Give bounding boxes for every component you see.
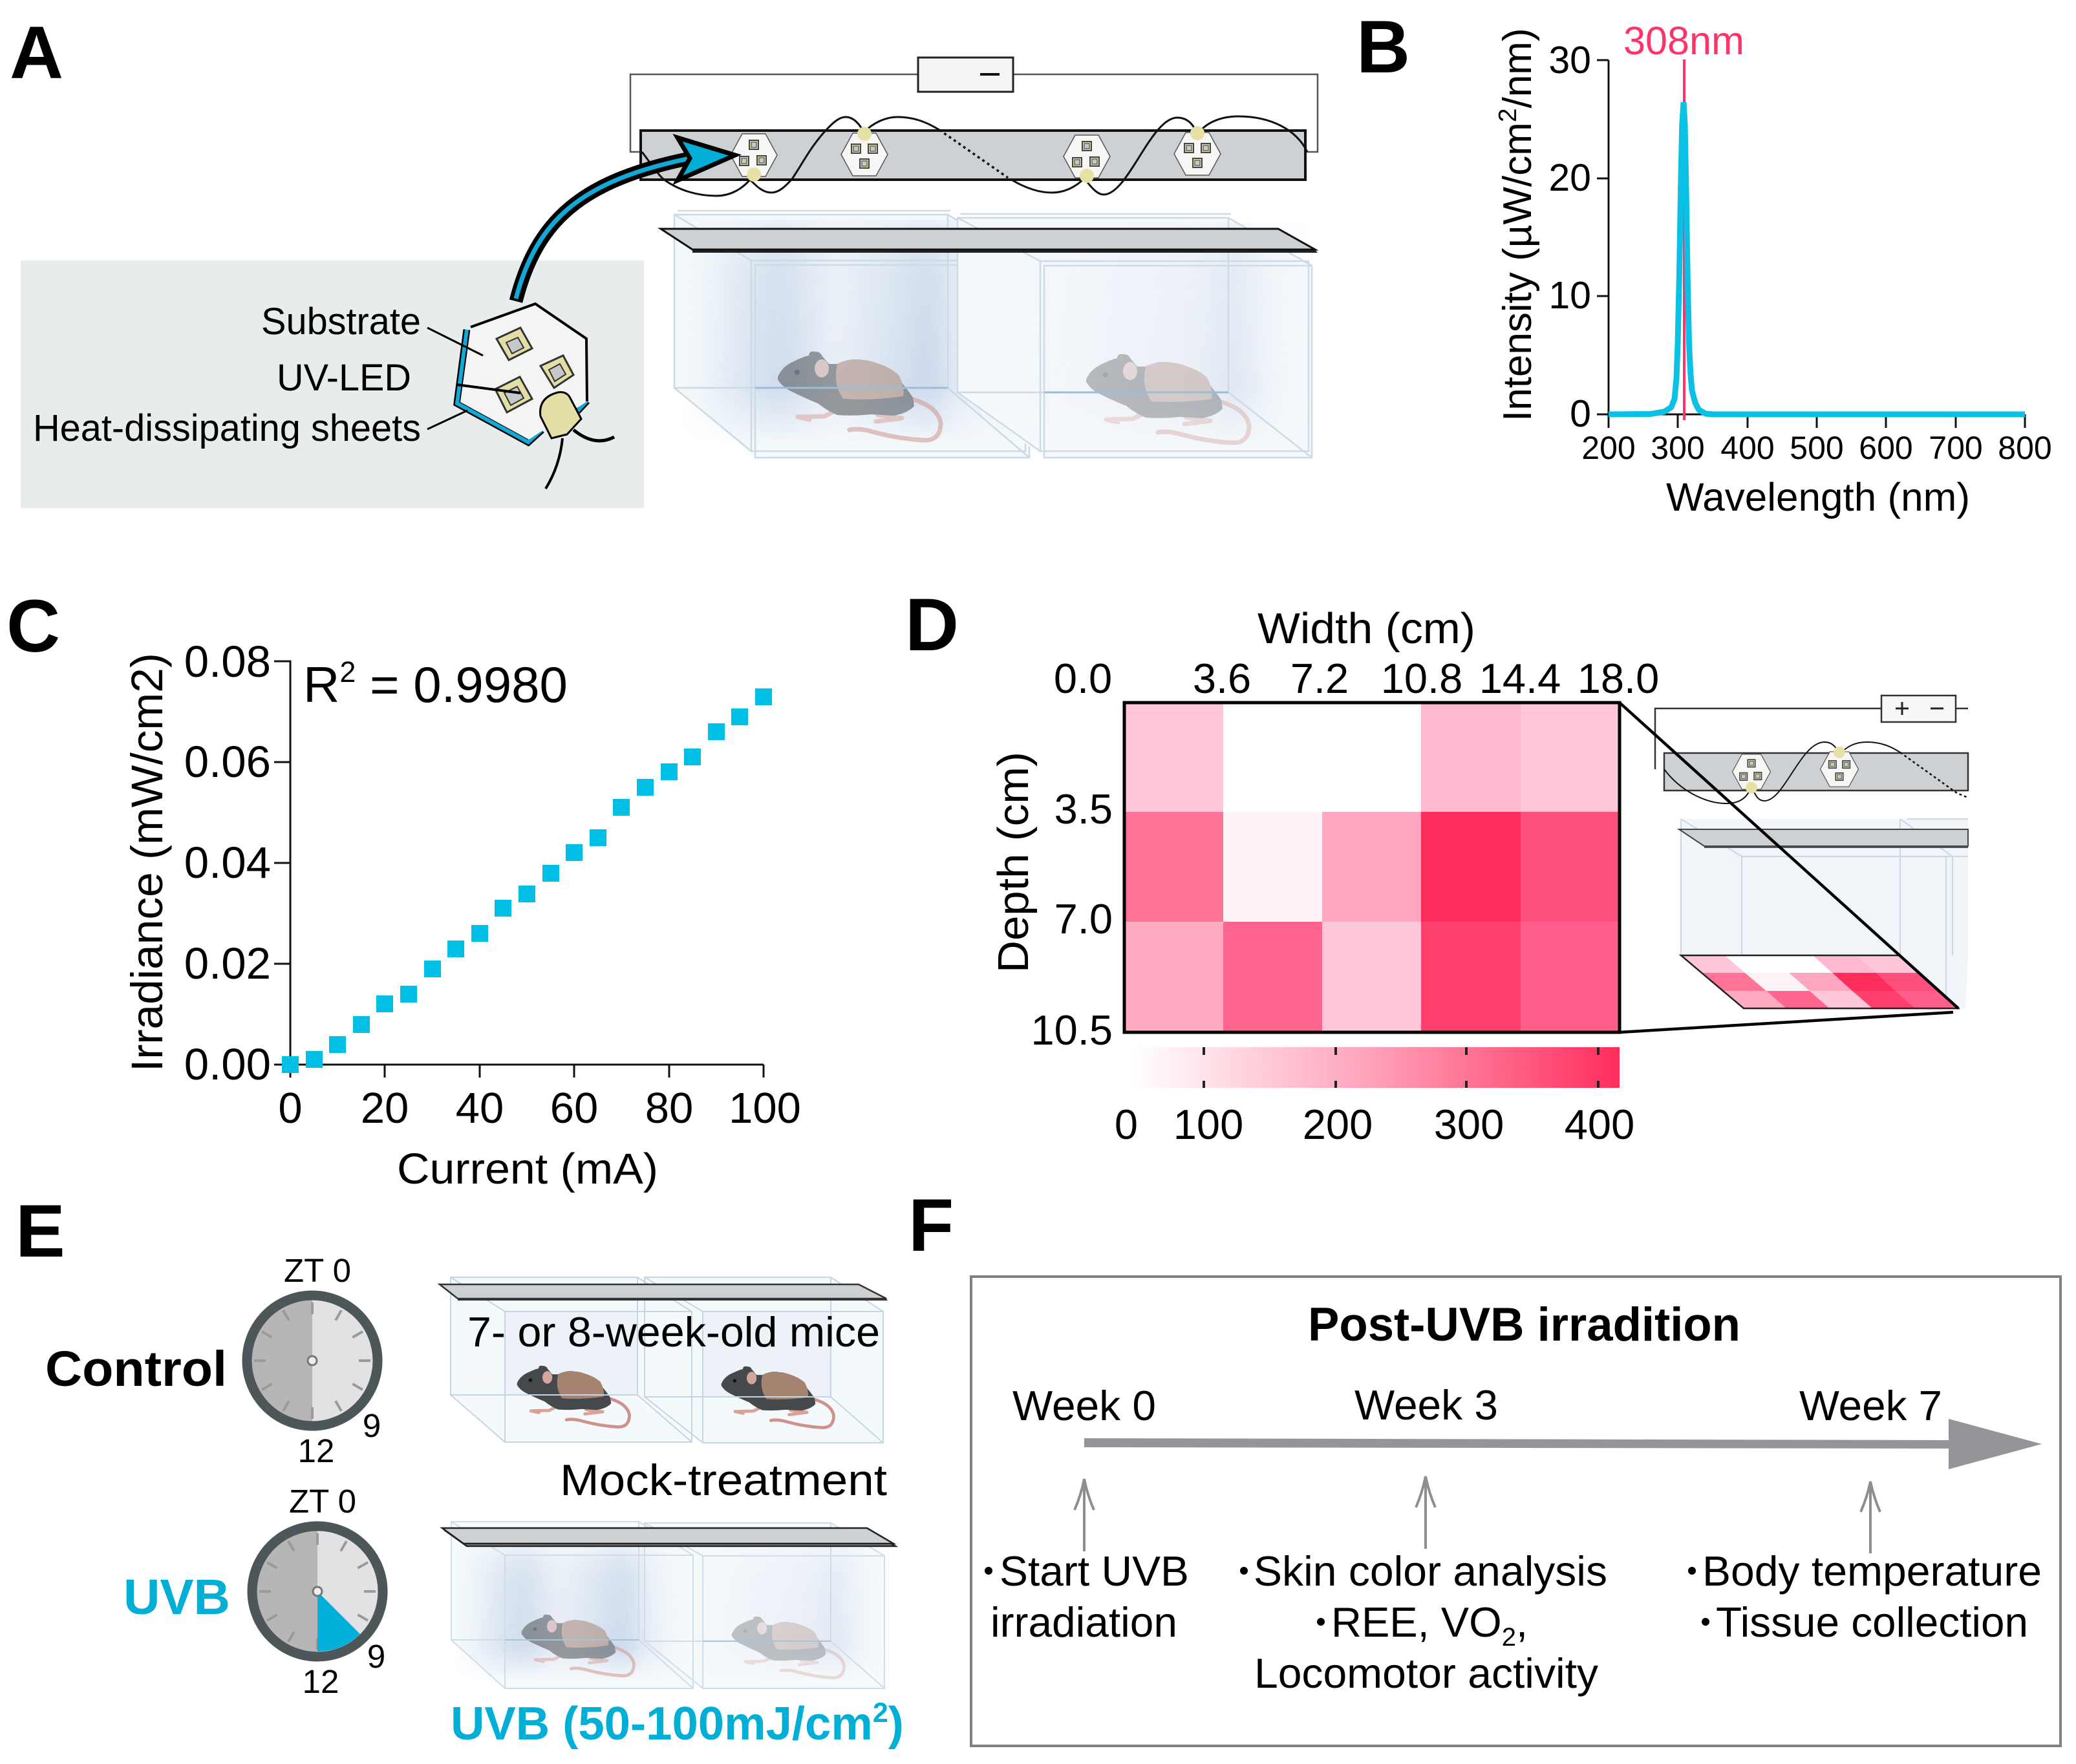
y tick labels: 0.02 <box>184 939 271 988</box>
colour bar labels: 0 <box>1115 1101 1138 1148</box>
zoom connector lines <box>1620 703 1958 1032</box>
y axis title: /nm) <box>1495 28 1540 108</box>
label: Substrate: Substrate <box>261 301 421 343</box>
LED bar <box>641 116 1307 196</box>
text: week 3 measurements: , <box>1516 1599 1528 1646</box>
x axis title: Wavelength (nm) <box>1666 475 1970 519</box>
y axis title: Irradiance (mW/cm2) <box>122 653 172 1072</box>
colour bar <box>1115 1047 1634 1148</box>
x axis title: Current (mA) <box>397 1145 658 1193</box>
UVB mouse left <box>522 1615 634 1676</box>
week 7 label: Week 7 <box>1799 1382 1942 1429</box>
timeline arrow <box>1084 1419 2042 1469</box>
text: week 3 measurements: 2 <box>1502 1623 1516 1652</box>
panel: timeline box <box>971 1277 2060 1746</box>
text: start UVB: irradiation <box>990 1599 1177 1646</box>
x tick labels: 400 <box>1720 430 1775 466</box>
x tick labels <box>278 1084 801 1132</box>
heatmap top axis: 0.0 <box>1054 655 1112 702</box>
x tick labels: 60 <box>550 1084 598 1132</box>
heatmap left axis: 3.5 <box>1054 785 1113 833</box>
clock: UVB labels: 9 <box>367 1638 385 1675</box>
label: UVB: UVB <box>123 1569 230 1625</box>
heatmap left axis: 7.0 <box>1054 895 1113 942</box>
UVB mouse right <box>732 1617 844 1678</box>
clock: UVB labels <box>289 1483 385 1700</box>
x tick labels: 0 <box>278 1084 303 1132</box>
control mouse left <box>517 1366 630 1427</box>
text: week 7 measurements: Body temperature <box>1702 1547 2042 1595</box>
label: mice age: 7- or 8-week-old mice <box>467 1308 880 1355</box>
arrow: LED detail to bar <box>516 138 735 301</box>
LED module 4 <box>1174 126 1221 175</box>
control mouse right <box>722 1366 834 1428</box>
heatmap top axis: 3.6 <box>1193 655 1251 702</box>
text: week 3 measurements: REE, VO <box>1331 1599 1502 1646</box>
label: Control: Control <box>45 1341 227 1397</box>
heatmap top axis: 7.2 <box>1290 655 1349 702</box>
heatmap <box>1124 703 1620 1032</box>
week 0 label: Week 0 <box>1012 1382 1156 1429</box>
chamber: left cage with mouse under UV <box>674 211 1029 458</box>
text: week 3 measurements: Locomotor activity <box>1254 1650 1599 1697</box>
text: week 3 measurements: Skin color analysis <box>1254 1547 1607 1595</box>
panel label C: C <box>6 585 60 668</box>
clock: UVB labels: ZT 0 <box>289 1483 356 1520</box>
y tick labels <box>1548 39 1591 435</box>
spectrum curve <box>1609 102 2025 414</box>
y tick labels: 20 <box>1548 156 1591 199</box>
x tick labels: 100 <box>729 1084 801 1132</box>
mouse <box>1086 354 1249 443</box>
circuit wire and power box <box>630 58 1318 152</box>
x tick labels: 20 <box>361 1084 409 1132</box>
plate <box>442 1528 895 1546</box>
clock: control labels: 12 <box>298 1432 334 1469</box>
panel label F: F <box>908 1184 954 1267</box>
clock: control labels: 9 <box>363 1407 381 1444</box>
x tick labels: 800 <box>1998 430 2052 466</box>
label: Substrate <box>261 301 483 356</box>
heatmap left axis: 10.5 <box>1031 1006 1113 1054</box>
colour bar labels: 200 <box>1303 1101 1373 1148</box>
text: start UVB <box>985 1547 1189 1646</box>
label: Mock-treatment: Mock-treatment <box>560 1456 887 1505</box>
clock: control labels: ZT 0 <box>284 1252 351 1289</box>
heatmap left axis <box>1031 785 1113 1054</box>
chart: UV spectrum <box>1494 19 2052 519</box>
week 3 label: Week 3 <box>1354 1381 1498 1429</box>
small arrow week 0 <box>1075 1479 1094 1551</box>
y axis title: 2 <box>1494 108 1522 122</box>
LED module 2 <box>841 127 888 176</box>
clock: UVB labels: 12 <box>303 1663 339 1700</box>
text: week 7 measurements <box>1688 1547 2042 1646</box>
r squared: 2 <box>339 655 356 688</box>
chamber: right cage with mouse under UV <box>958 214 1312 458</box>
plate <box>440 1284 888 1301</box>
clock: UVB <box>252 1526 383 1657</box>
icon: LED substrate hexagon <box>457 304 614 489</box>
inset LED module 2 <box>1820 747 1859 787</box>
heatmap top axis: 10.8 <box>1381 655 1462 702</box>
y tick labels <box>184 637 271 1089</box>
x tick labels: 700 <box>1929 430 1983 466</box>
x tick labels: 600 <box>1859 430 1913 466</box>
r squared: = 0.9980 <box>356 656 568 713</box>
data points <box>282 688 772 1073</box>
colour bar labels: 300 <box>1434 1101 1504 1148</box>
y tick labels: 0.06 <box>184 737 271 787</box>
LED module 1 <box>731 134 777 182</box>
x tick labels: 80 <box>645 1084 693 1132</box>
y tick labels: 0.08 <box>184 637 271 686</box>
chart: irradiance vs current <box>122 637 801 1193</box>
label: UV-LED <box>277 357 520 399</box>
inset floor heatmap <box>1681 955 1958 1008</box>
x tick labels: 500 <box>1790 430 1844 466</box>
LED module 3 <box>1064 135 1110 183</box>
label: Heat-dissipating sheets: Heat-dissipating sheets <box>33 407 421 449</box>
mouse <box>778 352 941 440</box>
y tick labels: 0.04 <box>184 838 271 887</box>
text: week 7 measurements: Tissue collection <box>1716 1599 2028 1646</box>
small arrow week 3 <box>1416 1476 1435 1549</box>
peak label: 308nm <box>1623 19 1744 63</box>
heatmap top axis <box>1054 655 1659 702</box>
r squared: R <box>303 656 339 713</box>
heatmap top title: Width (cm) <box>1257 604 1475 653</box>
y tick labels: 10 <box>1548 274 1591 317</box>
chambers: UVB treatment <box>442 1522 895 1688</box>
label: UVB dose: 2 <box>873 1697 888 1728</box>
panel label A: A <box>10 12 63 94</box>
clock: control labels <box>284 1252 381 1469</box>
label: UVB dose: UVB (50-100mJ/cm <box>451 1697 873 1750</box>
text: week 3 measurements <box>1240 1547 1607 1697</box>
clock: control <box>247 1295 378 1426</box>
colour bar labels <box>1115 1101 1634 1148</box>
y tick labels: 0 <box>1570 392 1591 435</box>
inset: LED setup with floor heatmap <box>1655 696 1968 1008</box>
panel label B: B <box>1356 6 1410 89</box>
x tick labels: 200 <box>1581 430 1636 466</box>
title: Post-UVB irradition <box>1308 1299 1740 1351</box>
x tick labels: 300 <box>1651 430 1705 466</box>
heatmap top axis: 14.4 <box>1479 655 1561 702</box>
panel: LED detail background <box>21 260 644 508</box>
small arrow week 7 <box>1861 1482 1880 1553</box>
y axis title: Intensity (µW/cm <box>1495 122 1540 421</box>
colour bar labels: 400 <box>1565 1101 1634 1148</box>
panel label D: D <box>905 584 959 666</box>
label: UV-LED: UV-LED <box>277 357 411 399</box>
label: UVB dose: ) <box>888 1697 904 1750</box>
peak marker <box>1683 59 1685 420</box>
panel label E: E <box>16 1190 65 1273</box>
chambers: mock treatment <box>440 1277 888 1443</box>
x tick labels <box>1581 430 2052 466</box>
inset LED module 1 <box>1732 754 1771 794</box>
y tick labels: 30 <box>1548 39 1591 81</box>
heatmap left title: Depth (cm) <box>989 752 1038 973</box>
text: start UVB: Start UVB <box>1000 1547 1189 1595</box>
heatmap top axis: 18.0 <box>1578 655 1659 702</box>
x tick labels: 40 <box>456 1084 504 1132</box>
colour bar labels: 100 <box>1173 1101 1243 1148</box>
LED plate above cages <box>661 229 1318 253</box>
y tick labels: 0.00 <box>184 1039 271 1089</box>
